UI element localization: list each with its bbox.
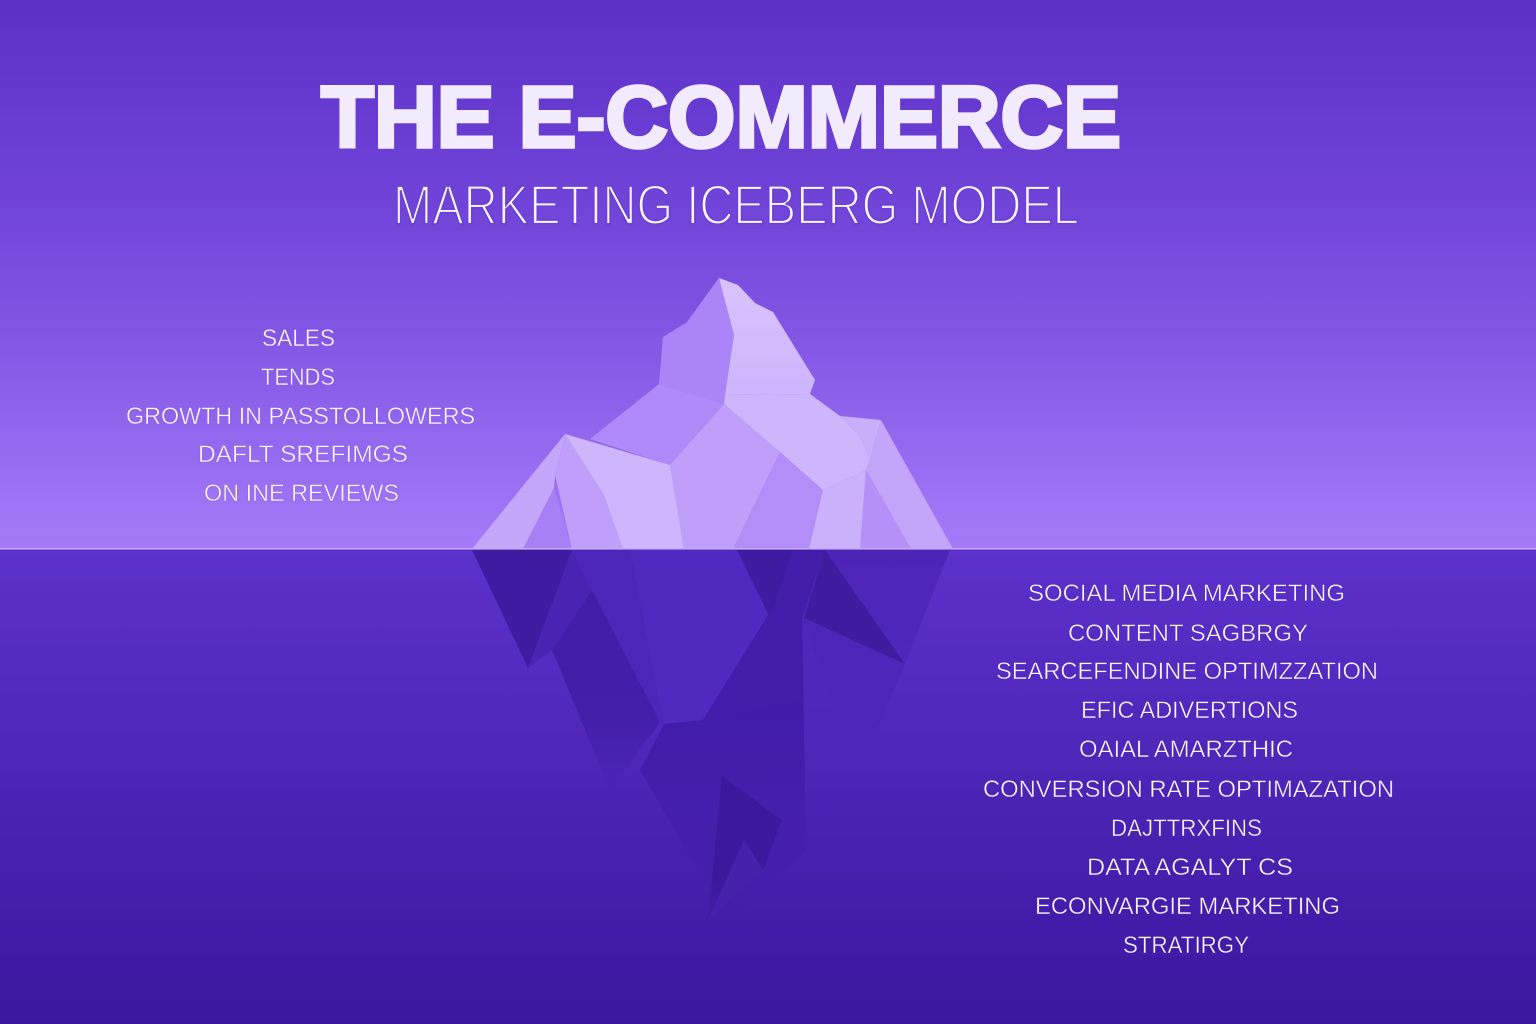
subtitle: MARKETING ICEBERG MODEL — [393, 173, 1079, 236]
iceberg: below water — [472, 550, 950, 925]
text block: above-water metrics — [126, 325, 475, 507]
waterline — [0, 548, 1536, 550]
text block: above-water metrics: TENDS — [261, 364, 335, 391]
text block: above-water metrics: GROWTH IN PASSTOLLOWERS — [126, 403, 475, 430]
iceberg: above water — [472, 278, 953, 549]
text block: below-water activities: CONTENT SAGBRGY — [1068, 620, 1308, 647]
text block: below-water activities: OAIAL AMARZTHIC — [1079, 736, 1293, 763]
text block: above-water metrics: ON INE REVIEWS — [204, 480, 399, 507]
text block: above-water metrics: DAFLT SREFIMGS — [198, 441, 408, 468]
text block: below-water activities: DAJTTRXFINS — [1111, 815, 1262, 842]
text block: below-water activities: STRATIRGY — [1123, 932, 1249, 959]
title: THE E-COMMERCE — [321, 69, 1121, 166]
text block: below-water activities: SEARCEFENDINE OPTIMZZATION — [996, 658, 1378, 685]
text block: below-water activities: EFIC ADIVERTIONS — [1081, 697, 1298, 724]
text block: below-water activities — [983, 580, 1394, 959]
text block: above-water metrics: SALES — [262, 325, 335, 352]
text block: below-water activities: DATA AGALYT CS — [1087, 854, 1293, 881]
background: sky — [0, 0, 1536, 549]
text block: below-water activities: CONVERSION RATE OPTIMAZATION — [983, 776, 1394, 803]
text block: below-water activities: SOCIAL MEDIA MARKETING — [1028, 580, 1345, 607]
background: sea — [0, 549, 1536, 1024]
text block: below-water activities: ECONVARGIE MARKETING — [1035, 893, 1340, 920]
